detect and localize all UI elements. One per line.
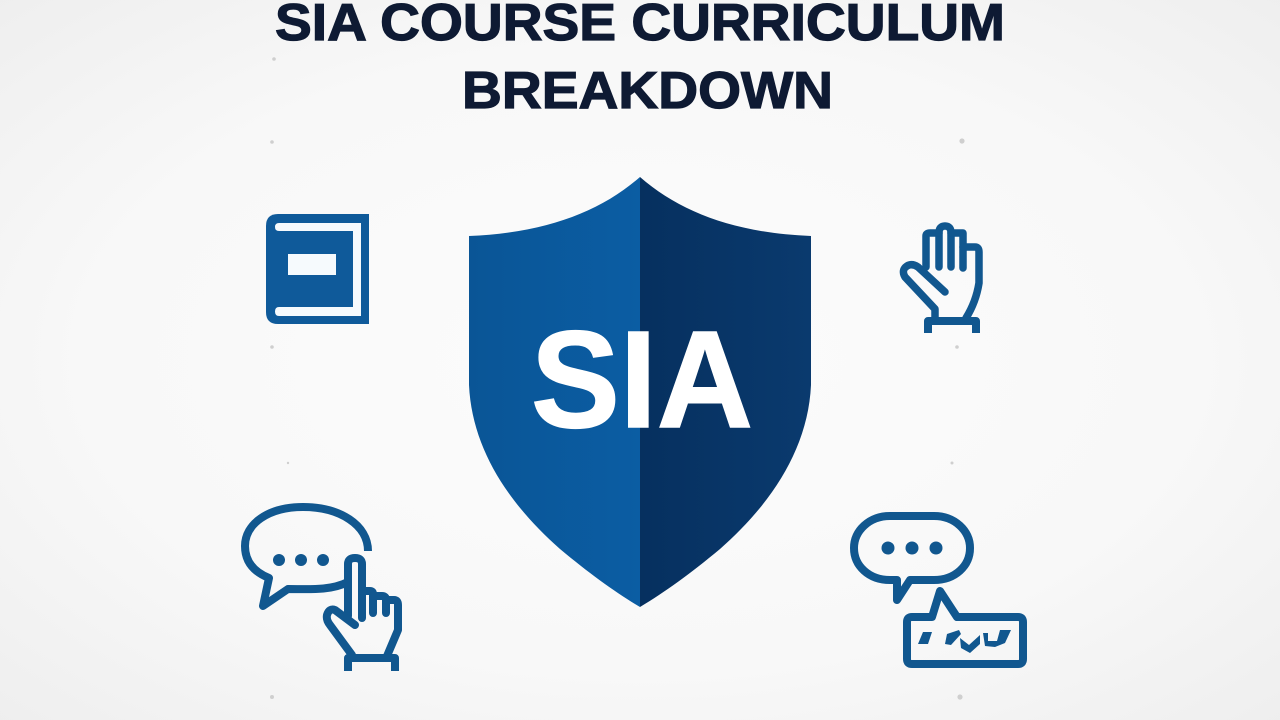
icon: book [266, 214, 369, 324]
icon: speech bubble with text box [854, 516, 1023, 664]
icon: chat bubble with pointing hand [245, 507, 398, 671]
icon: raised hand [903, 226, 979, 333]
icon: SIA shield [469, 177, 811, 607]
icon: SIA shield: SIA [531, 303, 753, 457]
title [275, 0, 1005, 120]
title: BREAKDOWN [462, 62, 833, 120]
